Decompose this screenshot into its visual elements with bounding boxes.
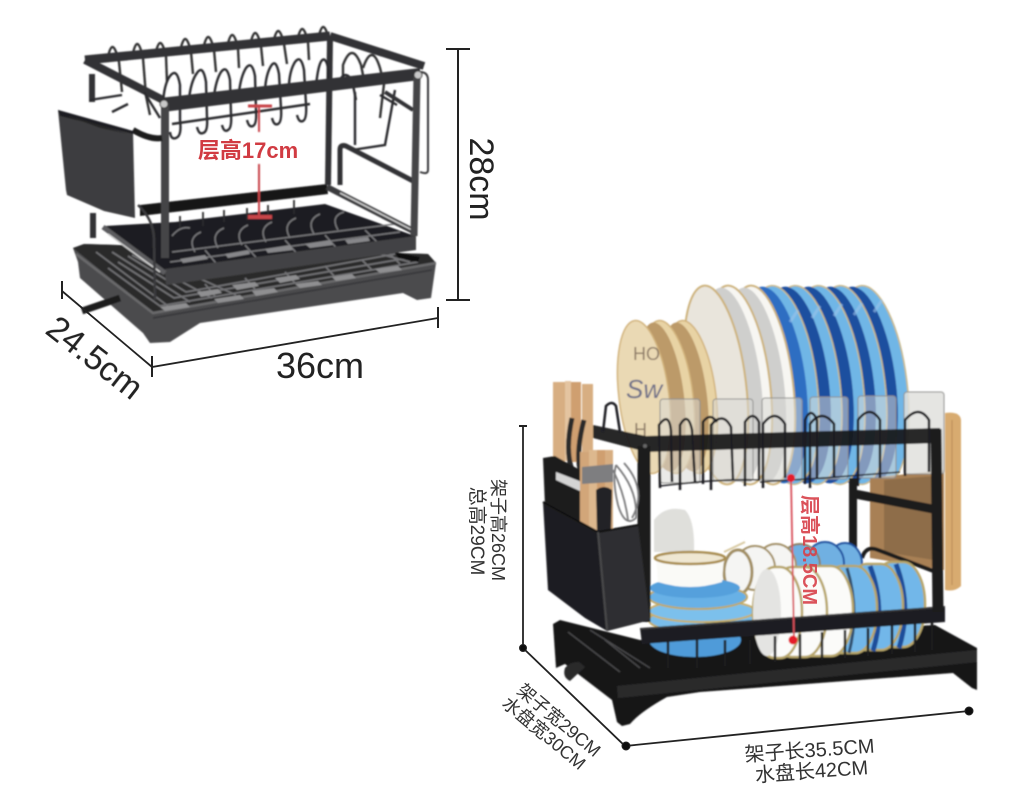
posts (638, 446, 650, 622)
knife (568, 418, 584, 470)
chopsticks tall (553, 381, 593, 466)
front hooks (90, 59, 397, 150)
white cup (654, 509, 694, 552)
back hooks (107, 27, 384, 118)
utensil caddy (58, 110, 135, 218)
left product: dish rack line drawing (58, 27, 436, 343)
lower shelf (103, 184, 416, 285)
upper rail (593, 425, 940, 452)
length labels: 架子长35.5CM (744, 735, 875, 767)
height label 28cm: 28cm (462, 137, 500, 221)
length labels (744, 735, 875, 787)
height labels: 架子高26CM (488, 479, 508, 581)
side loop (420, 72, 428, 173)
right product: loaded dish rack (543, 282, 977, 726)
drain tray (73, 244, 436, 343)
length label 36cm: 36cm (276, 345, 364, 386)
posts (161, 103, 169, 258)
stacked bowls and plates (649, 542, 755, 657)
dimension lines: left rack (62, 49, 470, 377)
white plates (674, 282, 805, 488)
inner height label: 层高18.5CM (798, 495, 822, 605)
drain tray (553, 620, 977, 726)
lower shelf wires and rail (640, 606, 945, 668)
height labels (466, 479, 508, 581)
blue plates (728, 282, 919, 488)
height labels: 总高29CM (466, 487, 488, 575)
left support wire (138, 205, 155, 300)
glasses (660, 392, 944, 483)
lower front rail (165, 236, 416, 285)
tan plates (610, 318, 725, 476)
dimension lines: right rack (519, 425, 973, 750)
short chopsticks and spatula (580, 450, 613, 532)
upper shelf hooks (603, 403, 929, 490)
top frame back and side rails (85, 36, 424, 238)
plate lettering: HO (633, 344, 660, 364)
layer height label: 层高17cm (198, 138, 298, 163)
back row bowls (724, 542, 862, 594)
layer height marker (248, 106, 272, 217)
plate lettering (626, 344, 664, 440)
length labels: 水盘长42CM (754, 756, 869, 787)
handle (82, 298, 120, 311)
cutting board (870, 413, 961, 590)
top front rail (160, 68, 420, 112)
tray wire mesh (96, 252, 418, 306)
right side bracket (340, 146, 415, 185)
inner height marker (787, 474, 798, 644)
plate lettering: Sw (626, 374, 664, 404)
front row bowls (753, 562, 925, 658)
plate lettering: H (634, 420, 647, 440)
width labels: 水盘宽30CM (498, 693, 589, 774)
whisk (613, 463, 638, 521)
back upright and crossbar (849, 478, 857, 552)
width labels: 架子宽29CM (513, 680, 604, 761)
rear caddy (543, 456, 595, 530)
front caddy (543, 502, 650, 631)
width label 24.5cm: 24.5cm (39, 309, 150, 407)
